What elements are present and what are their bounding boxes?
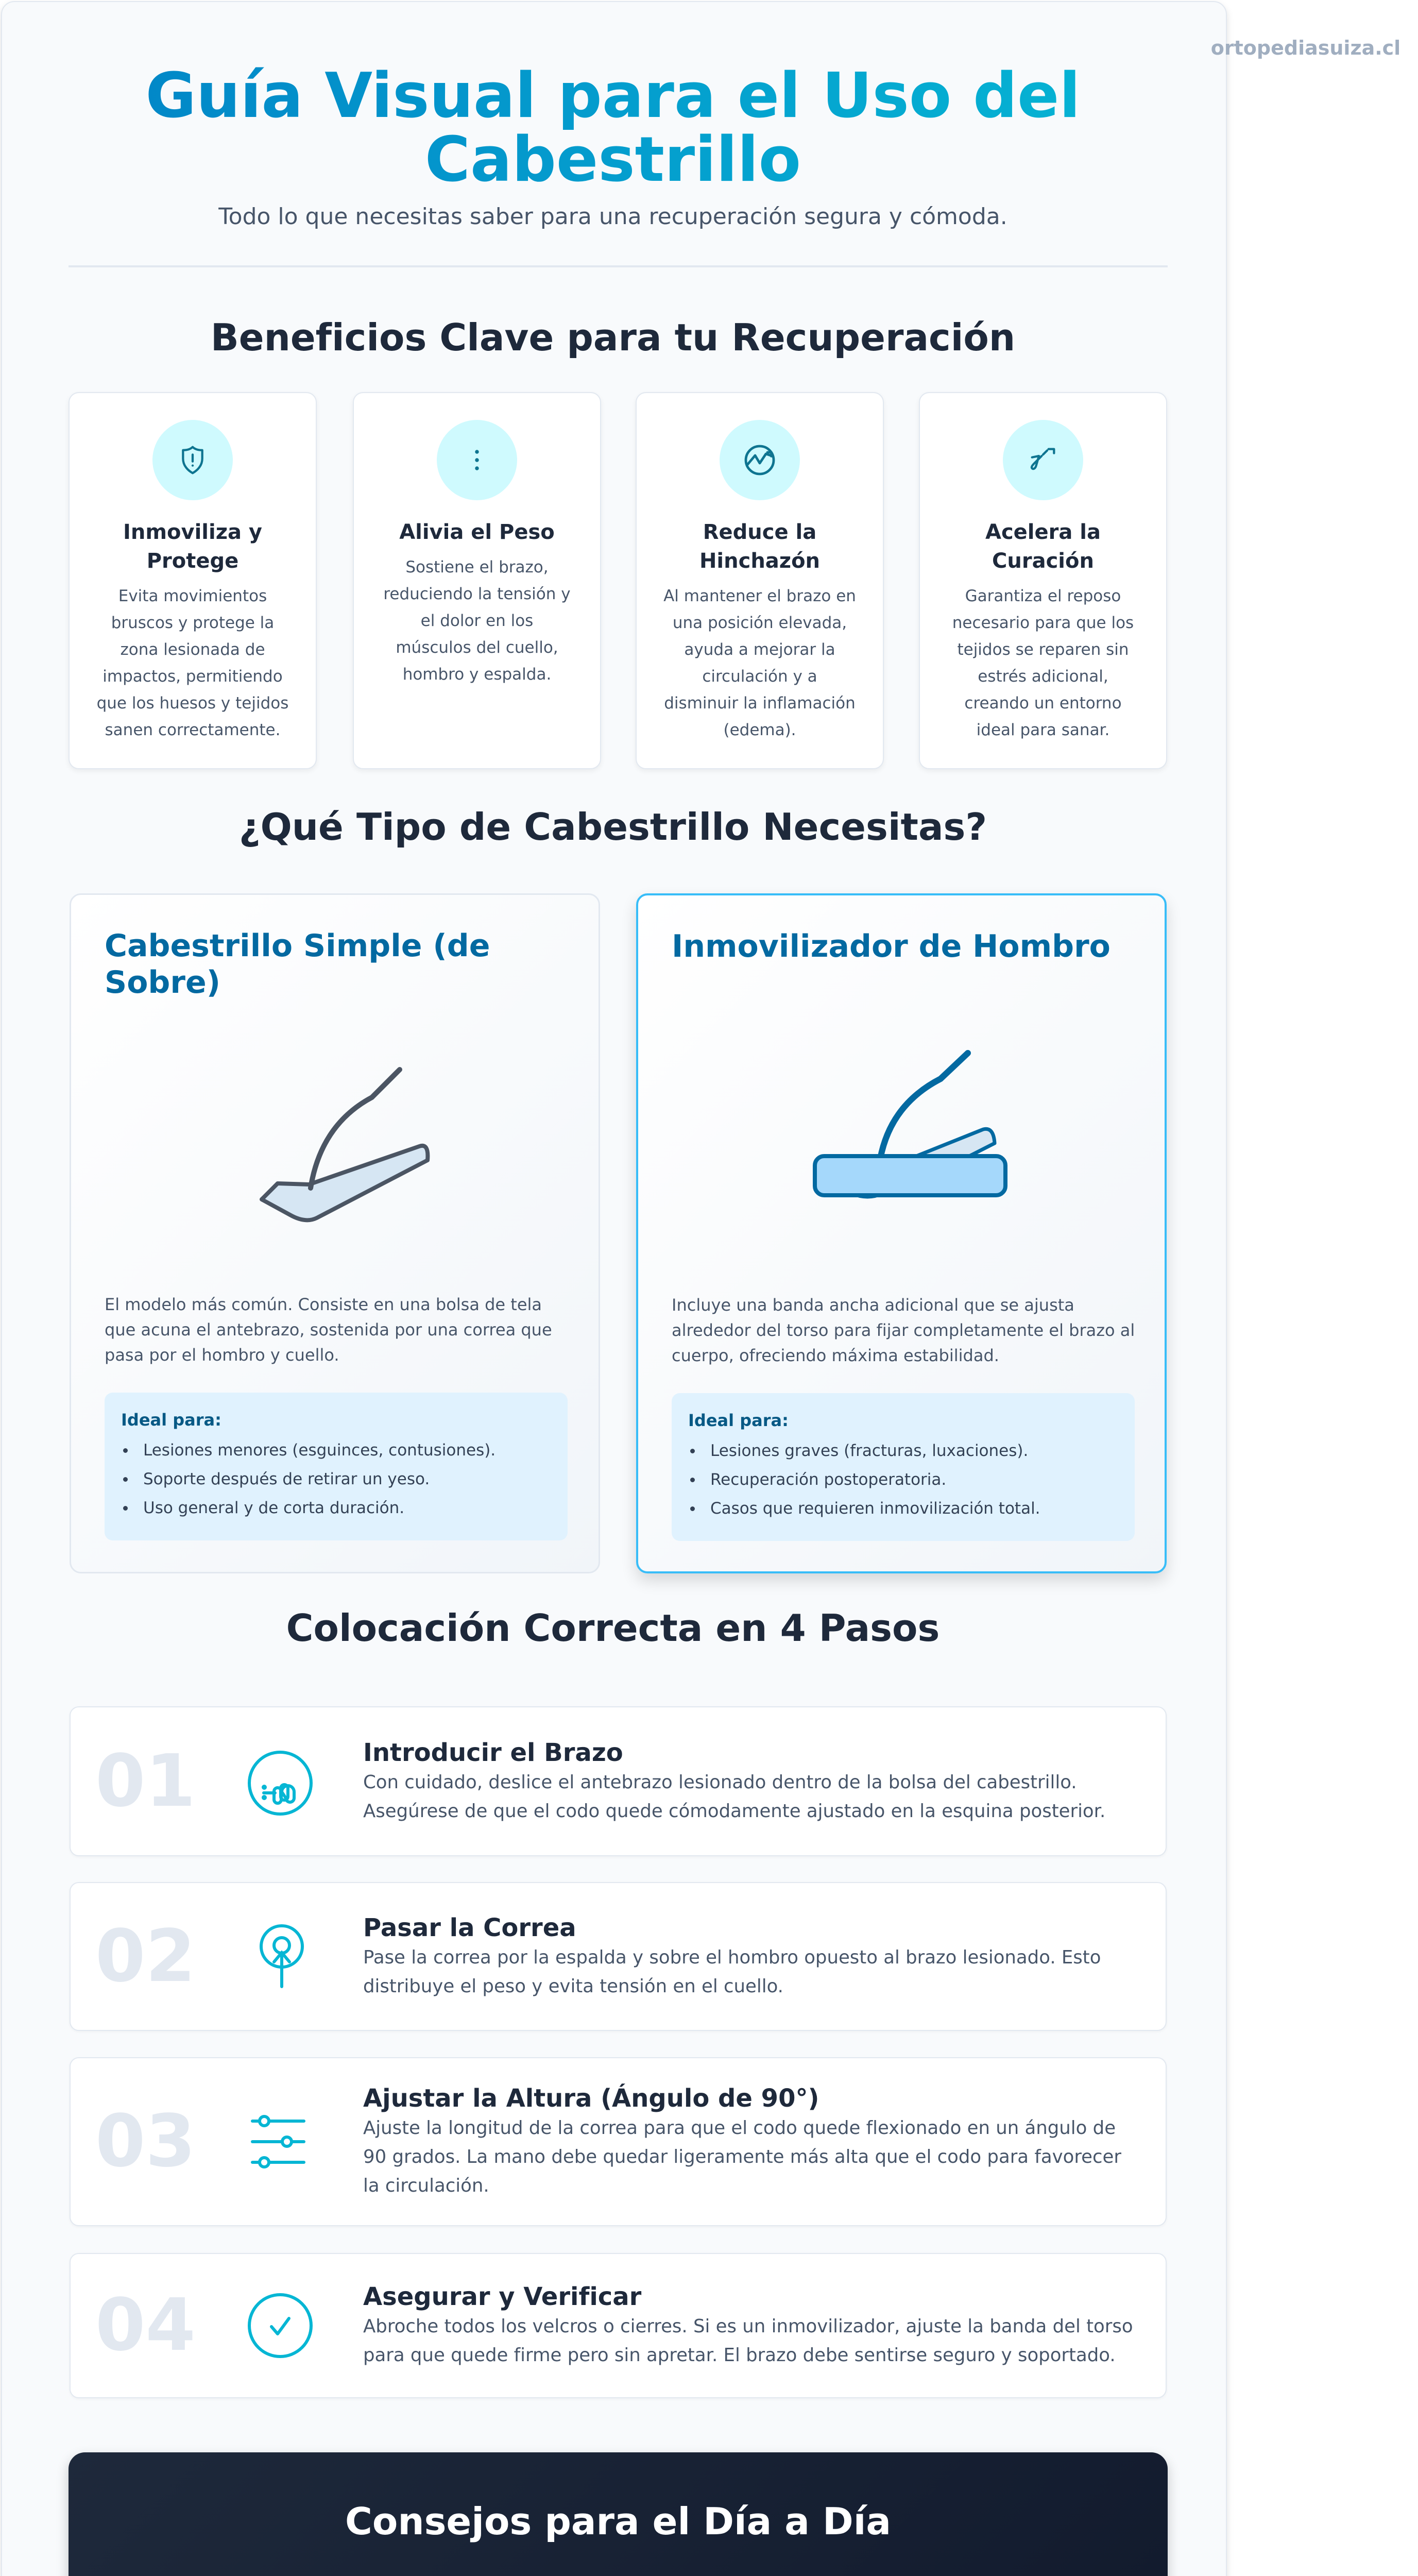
step text: Ajustar la Altura (Ángulo de 90°) — [363, 2084, 819, 2113]
text: Evita movimientos — [118, 587, 267, 605]
number: 03 — [95, 2099, 196, 2183]
heading: colocacion: Colocación Correcta en 4 Pasos — [286, 1606, 939, 1650]
subtitle: Todo lo que necesitas saber para una recuperación segura y cómoda. — [218, 204, 1007, 230]
step 1 — [70, 1706, 1167, 1856]
text: ideal para sanar. — [977, 721, 1109, 739]
description: que acuna el antebrazo, sostenida por una correa que — [105, 1320, 552, 1340]
heading: Consejos para el Día a Día — [345, 2500, 891, 2543]
icon: strap — [260, 1924, 304, 1988]
description: alrededor del torso para fijar completamente el brazo al — [672, 1320, 1135, 1340]
step text — [363, 1913, 1101, 1997]
ideal box: Lesiones menores (esguinces, contusiones). — [143, 1441, 496, 1460]
text: que los huesos y tejidos — [97, 694, 288, 713]
ideal box: Casos que requieren inmovilización total. — [710, 1499, 1040, 1518]
step text — [363, 2282, 1133, 2366]
step text: Ajuste la longitud de la correa para que el codo quede flexionado en un ángulo de — [363, 2117, 1116, 2139]
ideal box: Ideal para: — [688, 1411, 789, 1430]
step text — [363, 1738, 1105, 1822]
text: necesario para que los — [952, 614, 1134, 632]
title — [52, 64, 1174, 192]
ideal box: Soporte después de retirar un yeso. — [143, 1470, 430, 1488]
text: Garantiza el reposo — [965, 587, 1121, 605]
icon: shield — [152, 420, 233, 500]
text: bruscos y protege la — [111, 614, 274, 632]
illustration: shoulder immobilizer — [813, 1050, 1007, 1198]
step text: Pasar la Correa — [363, 1913, 576, 1942]
card title: Cabestrillo Simple (de Sobre) — [105, 928, 490, 1001]
panel: inmovilizador — [636, 893, 1167, 1573]
text: el dolor en los — [421, 612, 533, 630]
text — [383, 520, 571, 684]
text: Acelera la — [985, 520, 1101, 544]
benefit card: inmoviliza — [69, 392, 317, 769]
step text: la circulación. — [363, 2175, 489, 2196]
text: Inmoviliza y — [123, 520, 262, 544]
description — [672, 1295, 1135, 1365]
text: reduciendo la tensión y — [383, 585, 571, 603]
ideal box — [672, 1393, 1135, 1541]
benefit card: hinchazon — [636, 392, 884, 769]
step text: Asegurar y Verificar — [363, 2282, 641, 2311]
icon: circle arm — [248, 1751, 313, 1816]
step text: Pase la correa por la espalda y sobre el hombro opuesto al brazo lesionado. Esto — [363, 1946, 1101, 1968]
text: creando un entorno — [964, 694, 1122, 713]
text: Curación — [992, 549, 1094, 573]
description: Incluye una banda ancha adicional que se ajusta — [672, 1295, 1074, 1315]
step 3 — [70, 2057, 1167, 2226]
ideal box: Recuperación postoperatoria. — [710, 1470, 946, 1489]
number: 01 — [95, 1739, 196, 1823]
text: impactos, permitiendo — [102, 667, 283, 686]
ideal box: Lesiones graves (fracturas, luxaciones). — [710, 1442, 1028, 1460]
icon: sliders — [251, 2115, 305, 2168]
ideal box: Uso general y de corta duración. — [143, 1499, 404, 1517]
title: Guía Visual para el Uso del — [145, 60, 1081, 132]
panel: cabestrillo simple — [70, 893, 600, 1573]
description: cuerpo, ofreciendo máxima estabilidad. — [672, 1346, 999, 1365]
step text: Introducir el Brazo — [363, 1738, 623, 1767]
step 2 — [70, 1882, 1167, 2031]
step text — [363, 2083, 1121, 2196]
text: Protege — [147, 549, 238, 573]
number: 02 — [95, 1914, 196, 1998]
step text: Asegúrese de que el codo quede cómodamente ajustado en la esquina posterior. — [363, 1800, 1105, 1822]
step text: para que quede firme pero sin apretar. El brazo debe sentirse seguro y soportado. — [363, 2345, 1116, 2366]
heading: tipo de cabestrillo: ¿Qué Tipo de Cabestrillo Necesitas? — [239, 805, 987, 849]
text: Hinchazón — [699, 549, 820, 573]
text: tejidos se reparen sin — [957, 640, 1129, 659]
text: zona lesionada de — [120, 640, 265, 659]
text: disminuir la inflamación — [664, 694, 856, 713]
step text: Abroche todos los velcros o cierres. Si es un inmovilizador, ajuste la banda del torso — [363, 2316, 1133, 2337]
text: Sostiene el brazo, — [405, 558, 549, 577]
text: sanen correctamente. — [105, 721, 280, 739]
card title: Inmovilizador de Hombro — [672, 928, 1111, 964]
text: Reduce la — [703, 520, 816, 544]
text: circulación y a — [702, 667, 817, 686]
number: 04 — [95, 2283, 196, 2367]
icon: check circle — [248, 2293, 313, 2358]
text: ayuda a mejorar la — [684, 640, 835, 659]
panel: consejos dia a dia — [69, 2452, 1168, 2576]
illustration: simple sling — [260, 1067, 430, 1222]
text: músculos del cuello, — [396, 638, 558, 657]
step 4 — [70, 2253, 1167, 2398]
step text: distribuye el peso y evita tensión en el cuello. — [363, 1975, 783, 1997]
description: pasa por el hombro y cuello. — [105, 1345, 339, 1365]
text — [663, 520, 856, 739]
text: (edema). — [723, 721, 796, 739]
icon: dots — [437, 420, 517, 500]
icon: healing — [1003, 420, 1083, 500]
step text: Con cuidado, deslice el antebrazo lesionado dentro de la bolsa del cabestrillo. — [363, 1771, 1077, 1793]
text: una posición elevada, — [673, 614, 847, 632]
text: Al mantener el brazo en — [663, 587, 856, 605]
text — [97, 520, 288, 739]
text: hombro y espalda. — [403, 665, 551, 684]
text: estrés adicional, — [978, 667, 1108, 686]
title: Cabestrillo — [425, 124, 801, 196]
ideal box: Ideal para: — [121, 1410, 221, 1430]
text: Alivia el Peso — [399, 520, 555, 544]
benefit card: curacion — [919, 392, 1167, 769]
step text: 90 grados. La mano debe quedar ligeramente más alta que el codo para favorecer — [363, 2146, 1121, 2167]
benefit card: alivia — [353, 392, 601, 769]
text — [952, 520, 1134, 739]
ideal box — [105, 1393, 568, 1540]
icon: chart circle — [720, 420, 800, 500]
watermark top-right: ortopediasuiza.cl — [1211, 37, 1400, 59]
description — [105, 1295, 552, 1365]
description: El modelo más común. Consiste en una bolsa de tela — [105, 1295, 542, 1314]
heading: beneficios: Beneficios Clave para tu Recuperación — [211, 316, 1015, 359]
